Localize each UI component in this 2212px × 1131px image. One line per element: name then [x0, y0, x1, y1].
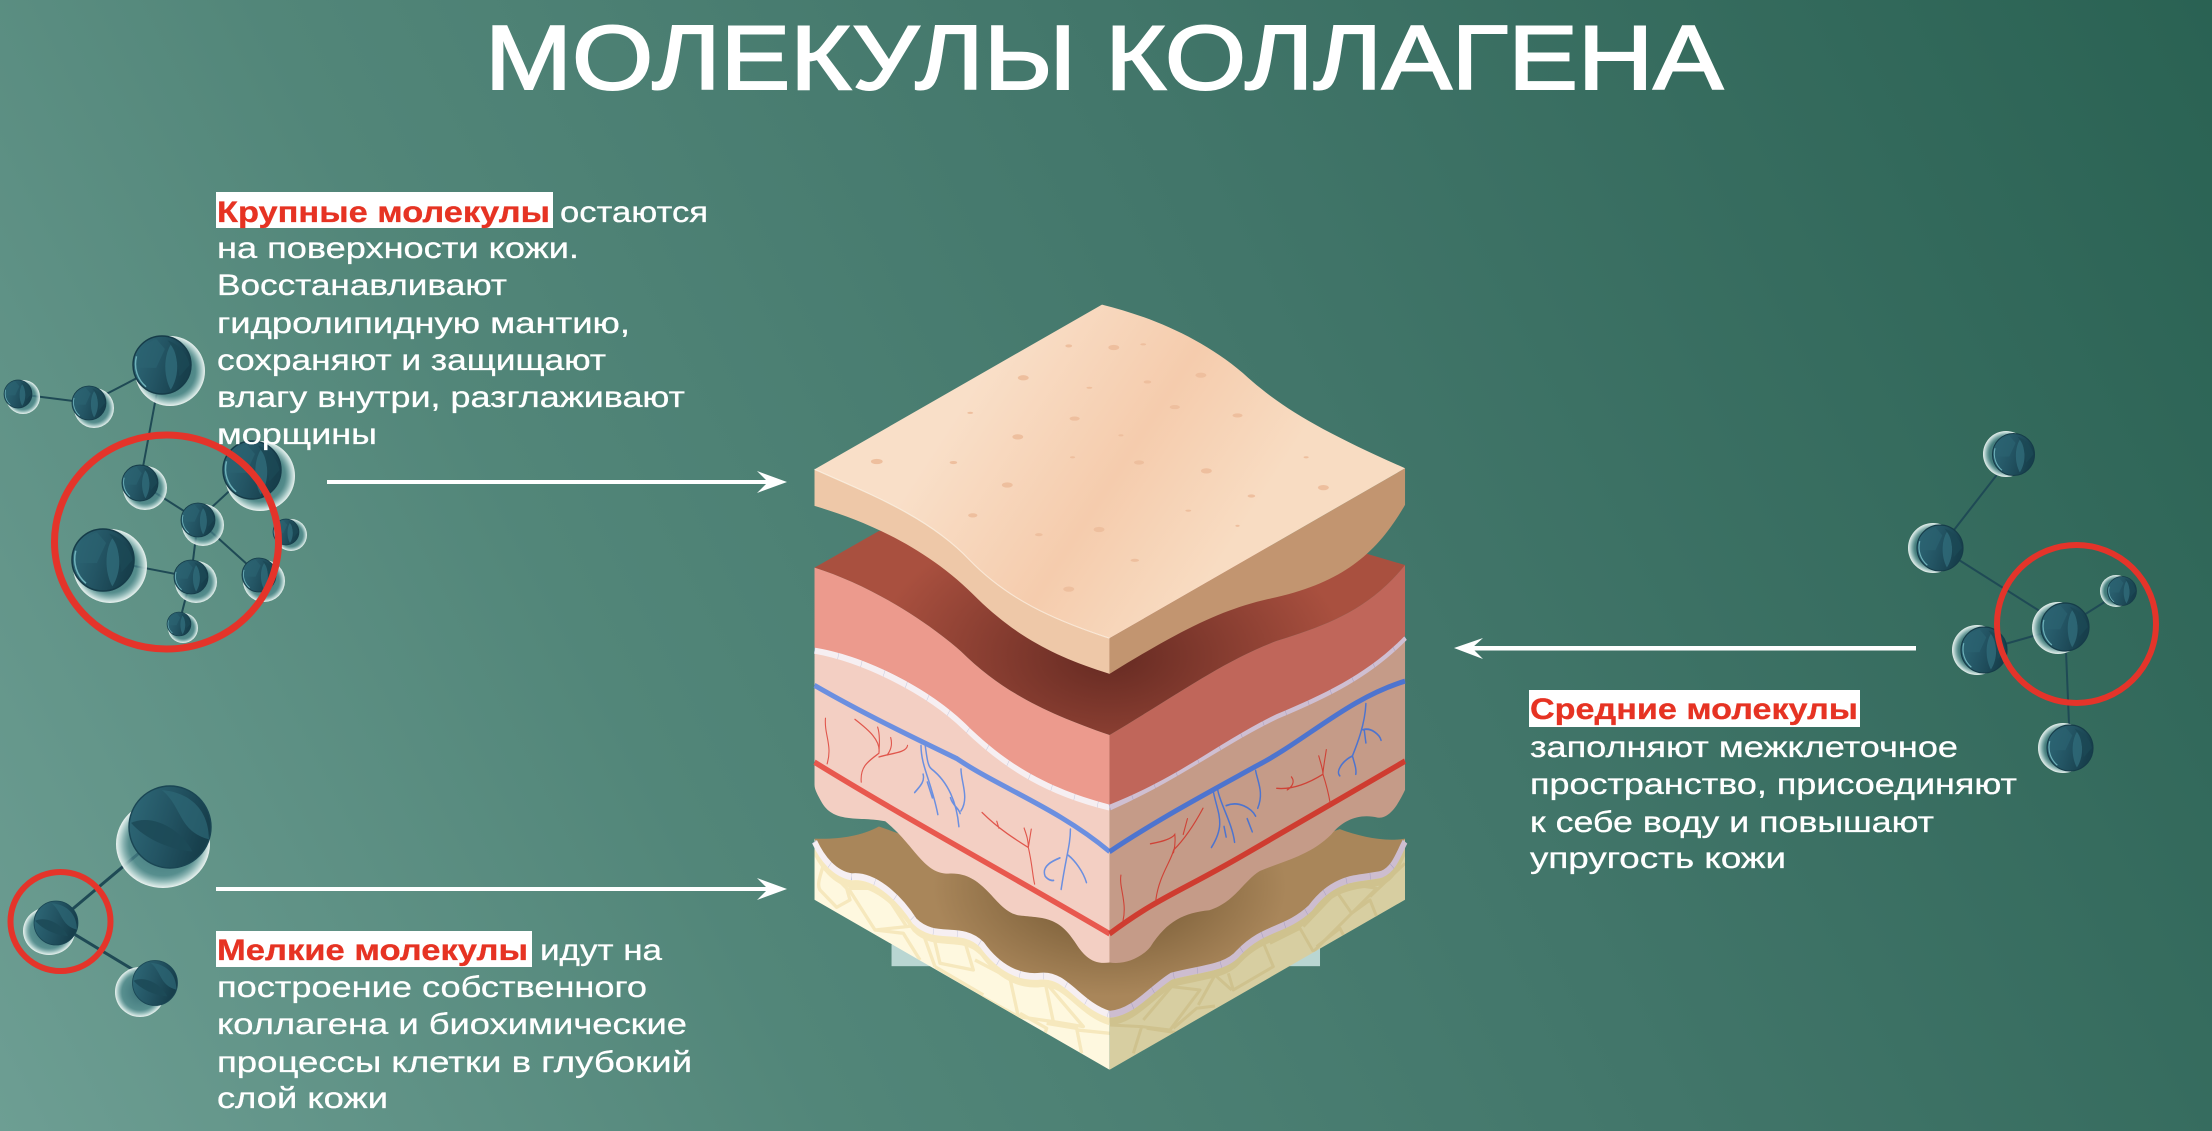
halos [6, 336, 307, 643]
text block: small molecules: идут на [540, 934, 662, 967]
text block: small molecules: Мелкие молекулы [217, 934, 528, 967]
capillaries blue [915, 704, 1381, 889]
dermis left face [815, 650, 1110, 963]
red ring: medium molecules [1997, 545, 2156, 703]
title: МОЛЕКУЛЫ КОЛЛАГЕНА [485, 8, 1723, 109]
skin layers illustration [815, 305, 1405, 1075]
text block: medium molecules: упругость кожи [1530, 842, 1786, 875]
red ring: small molecules [10, 872, 110, 971]
blue vessel [815, 681, 1405, 852]
top skin left side [815, 469, 1110, 674]
text block: small molecules: процессы клетки в глубокий [217, 1046, 692, 1079]
capillaries red [825, 718, 1330, 921]
top skin surface [815, 305, 1405, 638]
red layer right face [1110, 565, 1405, 805]
text block: small molecules: коллагена и биохимические [217, 1008, 687, 1041]
red ring: large molecules [54, 435, 278, 649]
arrow: medium molecules to middle layer [1454, 638, 1916, 659]
text block: large molecules: сохраняют и защищают [217, 344, 606, 377]
text block: large molecules: Крупные молекулы [217, 196, 550, 229]
text block: large molecules: влагу внутри, разглаживают [217, 381, 685, 414]
text block: large molecules: на поверхности кожи. [217, 232, 579, 265]
brown layer [815, 827, 1405, 1011]
arrow: large molecules to skin surface [327, 471, 787, 493]
text block: small molecules [216, 931, 692, 1115]
fat layer [815, 834, 1405, 1075]
text block: large molecules [216, 192, 708, 451]
red vessel [815, 761, 1405, 934]
skin pores [871, 343, 1329, 592]
arrow: small molecules to deep layer [216, 878, 787, 900]
text block: large molecules: морщины [217, 418, 377, 451]
molecule: medium molecules [1908, 431, 2136, 773]
red layer top [815, 531, 1405, 735]
pale base strip [892, 944, 1320, 966]
red layer left face [815, 568, 1110, 805]
text block: large molecules: Восстанавливают [217, 269, 507, 302]
text block: medium molecules [1529, 690, 2017, 875]
text block: small molecules: слой кожи [217, 1082, 388, 1115]
text block: small molecules: построение собственного [217, 971, 647, 1004]
text block: medium molecules: заполняют межклеточное [1530, 731, 1958, 764]
text block: medium molecules: Средние молекулы [1530, 693, 1858, 726]
molecule: small molecules [23, 786, 211, 1017]
molecule: large molecules [4, 336, 307, 643]
lower membrane [815, 842, 1405, 1014]
upper membrane [815, 637, 1405, 807]
text block: medium molecules: пространство, присоединяют [1530, 768, 2017, 801]
dermis right face [1110, 638, 1405, 963]
text block: medium molecules: к себе воду и повышают [1530, 806, 1934, 839]
top skin right side [1110, 468, 1405, 674]
text block: large molecules: остаются [560, 196, 708, 229]
text block: large molecules: гидролипидную мантию, [217, 307, 630, 340]
